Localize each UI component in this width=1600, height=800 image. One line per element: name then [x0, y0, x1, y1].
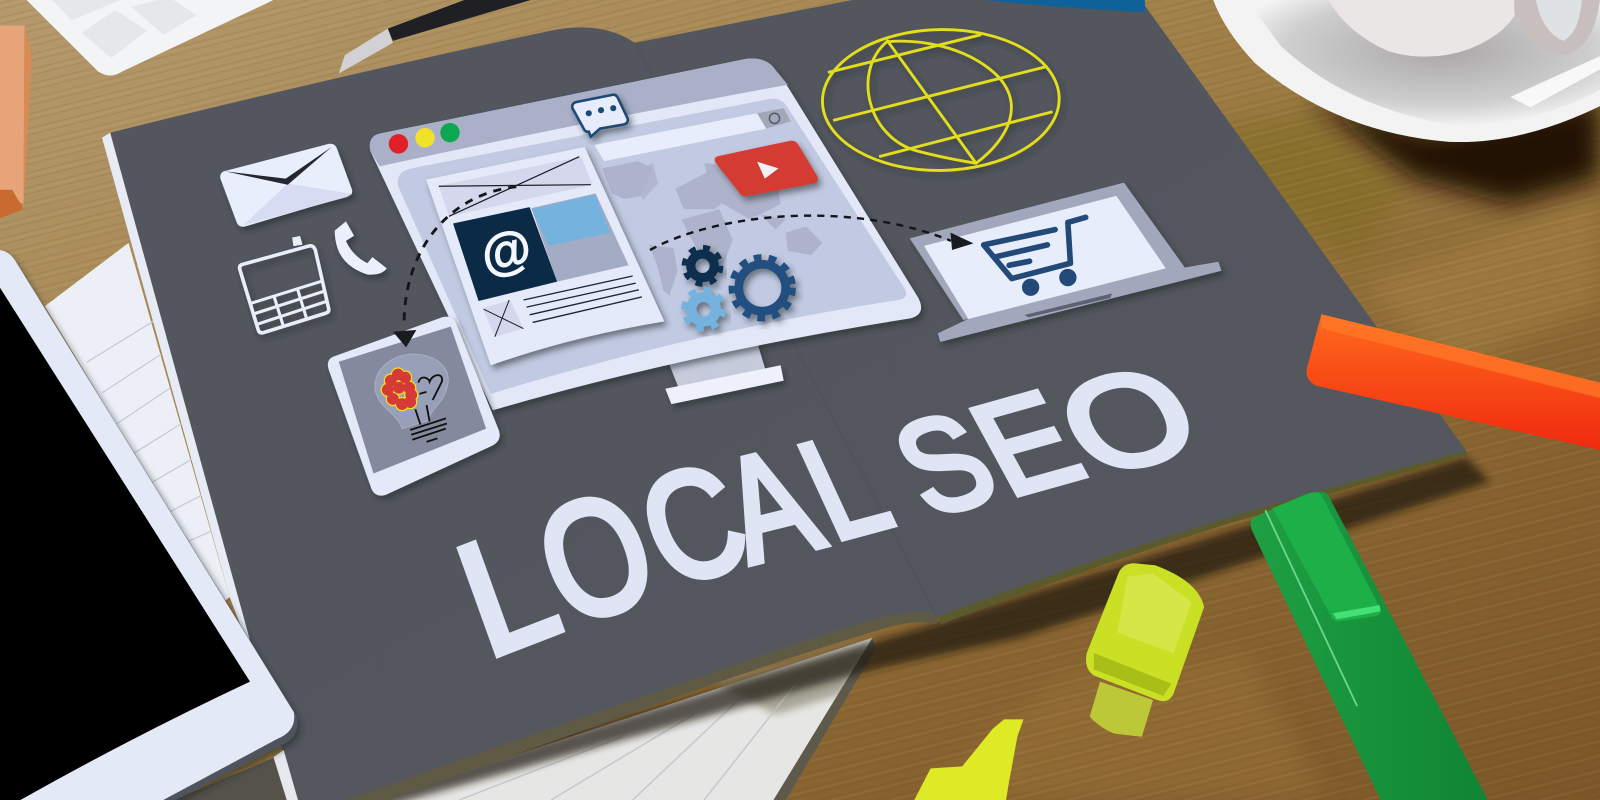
- dashed arrow to laptop: [650, 216, 973, 250]
- text lines: [523, 276, 642, 322]
- yellow highlighter cap: [1086, 563, 1204, 737]
- title: LOCAL SEO: C: [617, 430, 769, 618]
- coffee saucer and cup: [1213, 0, 1600, 142]
- notebook shadow: [347, 457, 1490, 800]
- red highlighter: [1307, 314, 1600, 450]
- lightbulb with brain and hand: [375, 354, 448, 442]
- shopping cart icon: [984, 217, 1086, 296]
- orange sticky notes: [0, 26, 32, 218]
- globe icon: [821, 28, 1060, 172]
- tablet lightbulb card: [328, 317, 500, 496]
- mobile phone icon: [240, 238, 329, 333]
- blue image block: [531, 193, 629, 282]
- video play tile: [715, 141, 818, 196]
- green highlighter: [1251, 492, 1488, 800]
- chat bubble: [572, 95, 628, 137]
- monitor stand: [663, 329, 784, 404]
- title bar: [370, 59, 788, 166]
- tablet device: [0, 250, 297, 800]
- pen: [339, 0, 531, 73]
- search button: [757, 108, 791, 129]
- yellow highlighter tip: [914, 719, 1023, 800]
- title: LOCAL SEO: A: [698, 417, 840, 594]
- inner panel: [398, 99, 906, 394]
- web page card: [426, 147, 664, 365]
- spiral notepad under notebook: [378, 638, 876, 800]
- small placeholder image: [482, 300, 523, 337]
- monitor frame: [370, 59, 921, 410]
- title: LOCAL SEO: S: [871, 385, 1019, 544]
- at sign tile: [453, 207, 557, 301]
- dashed arrow to lightbulb: [393, 187, 516, 347]
- gears: [684, 248, 792, 329]
- monitor illustration: [370, 59, 921, 410]
- title: LOCAL SEO: L: [438, 491, 578, 692]
- title: LOCAL SEO: L: [778, 403, 911, 570]
- at sign tile: @: [476, 218, 536, 284]
- world map: [602, 161, 822, 296]
- title: LOCAL SEO: O: [515, 454, 677, 660]
- search bar: [594, 113, 766, 161]
- window control buttons: [389, 123, 460, 154]
- paper below tablet: [173, 750, 298, 800]
- keyboard: [27, 0, 273, 76]
- lined paper under notebook: [45, 243, 230, 602]
- title: LOCAL SEO: O: [1032, 337, 1224, 504]
- title: LOCAL SEO: E: [948, 364, 1105, 524]
- laptop with shopping cart: [910, 183, 1221, 342]
- saucer shadow: [1306, 97, 1600, 204]
- telephone handset icon: [335, 221, 387, 275]
- envelope icon: [220, 144, 352, 227]
- title: LOCAL SEO: [438, 337, 1224, 692]
- blue book corner: [985, 0, 1145, 12]
